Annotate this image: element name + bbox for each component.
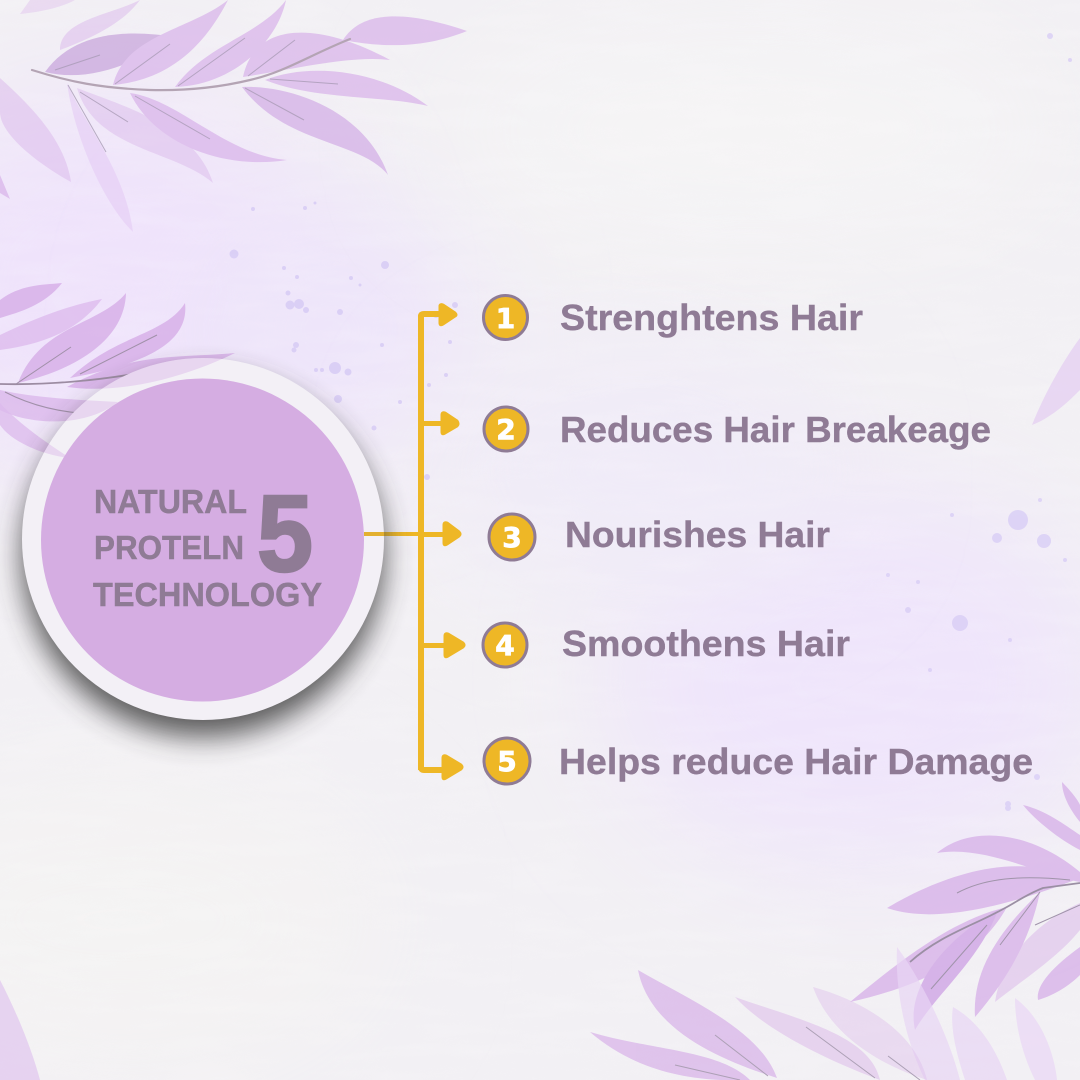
arrow 1 <box>440 305 456 325</box>
label 2: Reduces Hair Breakeage <box>560 409 991 450</box>
number badge 4 <box>483 623 527 667</box>
number badge 5 <box>484 738 530 784</box>
leaves: top left foliage <box>0 0 467 232</box>
label 5: Helps reduce Hair Damage <box>559 741 1033 782</box>
leaf branch: top left <box>0 0 467 232</box>
list item 1 <box>484 296 863 340</box>
badge text: NATURAL <box>94 483 247 520</box>
leaves: left foliage <box>0 283 235 458</box>
number badge 1: 1 <box>496 302 515 335</box>
number badge 2 <box>484 407 528 451</box>
leaf veins: top left <box>55 38 338 152</box>
arrow 3 <box>421 523 460 545</box>
pale leaves: bottom right <box>897 947 1057 1080</box>
leaf: bottom left corner <box>0 980 40 1080</box>
list item 2 <box>484 407 991 451</box>
paint splatter: right side <box>886 33 1072 811</box>
number badge 3: 3 <box>502 521 522 554</box>
paint splatter: upper centre <box>230 202 458 480</box>
list item 3 <box>489 514 830 560</box>
badge inner disc <box>41 378 364 702</box>
number badge 4: 4 <box>495 629 515 662</box>
label 3: Nourishes Hair <box>565 514 830 555</box>
arrow 5 <box>421 756 462 779</box>
leaf: right edge <box>1032 338 1080 425</box>
number badge 2: 2 <box>496 413 516 446</box>
leaf branch: bottom centre <box>590 970 927 1080</box>
number badge 1 <box>484 296 528 340</box>
list item 4 <box>483 623 850 667</box>
arrow 2 <box>421 413 458 434</box>
list item 5 <box>484 738 1033 784</box>
stem: left branch <box>0 368 165 384</box>
leaves showing through ring <box>44 358 222 457</box>
arrow 4 <box>421 634 464 657</box>
badge outer ring <box>22 358 384 720</box>
main badge: Natural Protein 5 Technology <box>0 293 384 737</box>
badge drop shadow <box>22 375 384 737</box>
label 4: Smoothens Hair <box>562 623 850 664</box>
stem: bottom right branch <box>910 883 1080 962</box>
connector: vertical trunk and branches <box>364 305 464 779</box>
vertical trunk <box>421 314 442 770</box>
connector overlay on ring <box>364 532 384 536</box>
badge text: TECHNOLOGY <box>93 576 322 613</box>
connector line from circle <box>364 532 422 536</box>
badge text: 5 <box>257 473 313 595</box>
number badge 5: 5 <box>497 745 517 778</box>
number badge 3 <box>489 514 535 560</box>
stem: top left branch <box>32 39 350 90</box>
leaves: bottom centre foliage <box>590 970 927 1080</box>
leaf veins: bottom right <box>931 878 1080 989</box>
leaf branch: left side <box>0 283 235 458</box>
badge text: PROTELN <box>94 529 244 566</box>
leaf branch: bottom right <box>850 782 1080 1080</box>
leaf veins: bottom centre <box>675 1027 920 1080</box>
label 1: Strenghtens Hair <box>560 297 863 338</box>
badge text <box>93 473 322 613</box>
leaf veins: left <box>5 335 157 414</box>
leaves: bottom right foliage <box>850 782 1080 1030</box>
